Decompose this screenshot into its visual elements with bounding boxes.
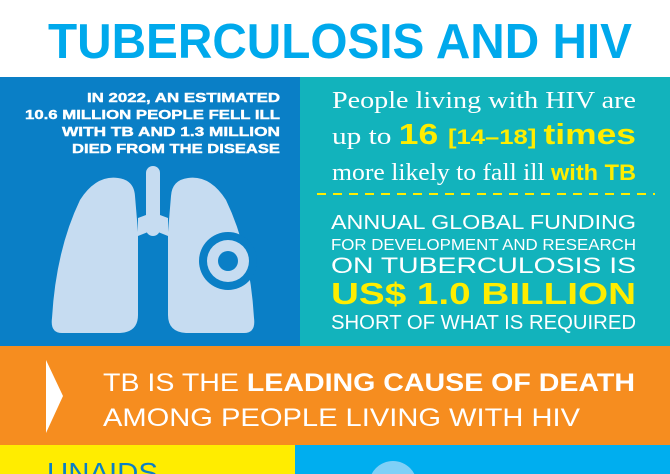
text block: TB statistics [25, 90, 280, 156]
text block: funding [331, 212, 636, 334]
text block: HIV risk: more likely to fall ill with TB [332, 160, 636, 186]
text block: TB statistics: 10.6 MILLION PEOPLE FELL ILL [25, 107, 280, 122]
banner: leading cause of death [0, 346, 670, 445]
panel: HIV risk and funding [300, 77, 670, 346]
icon: lungs [52, 166, 257, 333]
panel: TB statistics [0, 77, 300, 346]
arrow [46, 360, 63, 433]
text block: funding: US$ 1.0 BILLION [331, 276, 636, 311]
text block: HIV risk: up to 16 [14–18] times [332, 119, 636, 151]
title: TUBERCULOSIS AND HIV [48, 15, 632, 69]
text block: HIV risk: People living with HIV are [332, 88, 636, 114]
text block: TB statistics: IN 2022, AN ESTIMATED [87, 90, 280, 105]
banner text: TB IS THE LEADING CAUSE OF DEATH [103, 369, 635, 397]
banner text: AMONG PEOPLE LIVING WITH HIV [103, 404, 580, 432]
text block: funding: ANNUAL GLOBAL FUNDING [331, 212, 636, 234]
text block: HIV risk [332, 88, 636, 186]
banner text [103, 369, 635, 432]
text block: funding: SHORT OF WHAT IS REQUIRED [331, 312, 636, 334]
text block: funding: FOR DEVELOPMENT AND RESEARCH [331, 237, 636, 254]
text block: TB statistics: WITH TB AND 1.3 MILLION [62, 124, 280, 139]
text block: funding: ON TUBERCULOSIS IS [331, 253, 636, 278]
panel: bottom right [295, 445, 670, 474]
text block: TB statistics: DIED FROM THE DISEASE [72, 141, 280, 156]
panel: UNAIDS [0, 445, 295, 474]
